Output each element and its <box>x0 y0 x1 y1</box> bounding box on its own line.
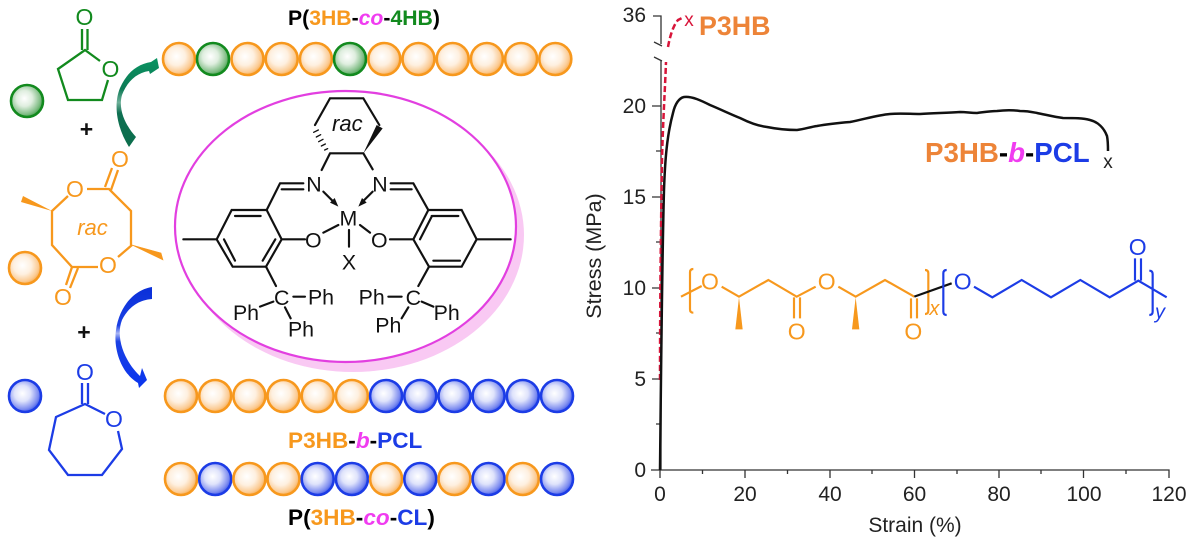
salen ligand structure: O <box>371 228 388 252</box>
molecule: racemic diolide: O <box>54 284 72 310</box>
label: P(3HB-co-CL): P(3HB-co-CL) <box>288 505 435 530</box>
y tick labels <box>623 4 646 482</box>
axes and ticks <box>651 16 1169 478</box>
break marker: P3HB: x <box>684 10 694 31</box>
title: P(3HB-co-4HB): P(3HB-co-4HB) <box>288 7 440 30</box>
x tick labels: 100 <box>1066 483 1102 506</box>
molecule: racemic diolide: O <box>111 146 129 172</box>
ellipse shadow <box>182 98 524 372</box>
panel: catalyst <box>175 91 524 372</box>
P3HB repeat unit: O <box>818 268 836 294</box>
bead: orange monomer <box>9 252 41 284</box>
bead chain: P3HB-b-PCL <box>165 380 573 412</box>
bead: green monomer <box>11 85 43 117</box>
bead chain: P(3HB-co-4HB) <box>163 43 571 75</box>
chart: stress-strain <box>582 4 1187 537</box>
molecule: caprolactone: O <box>76 359 94 385</box>
break marker: P3HB-b-PCL: x <box>1103 152 1113 173</box>
molecule: gamma-butyrolactone: O <box>102 56 119 82</box>
molecule: gamma-butyrolactone: O <box>76 4 93 30</box>
curve: P3HB <box>660 17 684 380</box>
y tick labels: 5 <box>634 368 646 391</box>
salen ligand structure: rac <box>332 111 363 136</box>
P3HB repeat unit <box>681 268 940 344</box>
PCL repeat unit: O <box>954 268 972 294</box>
molecule: gamma-butyrolactone <box>58 4 119 100</box>
salen ligand structure <box>183 98 511 342</box>
PCL repeat unit <box>943 234 1167 323</box>
molecule: racemic diolide <box>21 146 163 310</box>
ellipse outline <box>175 91 516 362</box>
salen ligand structure: O <box>305 228 322 252</box>
salen ligand structure: Ph <box>359 285 385 309</box>
salen ligand structure: Ph <box>308 285 334 309</box>
P3HB repeat unit: O <box>701 268 719 294</box>
molecule: caprolactone <box>49 359 123 475</box>
x tick labels: 80 <box>987 483 1011 506</box>
y tick labels: 36 <box>623 4 646 27</box>
arrow: blue curved <box>115 287 152 388</box>
linking bond <box>914 283 952 297</box>
bead chain: P(3HB-co-CL) <box>165 463 573 495</box>
salen ligand structure: Ph <box>375 314 401 338</box>
plus sign: + <box>80 116 93 142</box>
molecule: racemic diolide: rac <box>77 215 108 240</box>
salen ligand structure: Ph <box>288 318 314 342</box>
y tick labels: 20 <box>623 95 646 118</box>
salen ligand structure: C <box>274 286 289 310</box>
molecule: caprolactone: O <box>105 406 123 432</box>
x axis title: Strain (%) <box>868 514 962 537</box>
plus sign: + <box>77 319 91 345</box>
y tick labels: 15 <box>623 186 646 209</box>
P3HB repeat unit: x <box>928 298 940 320</box>
x tick labels: 0 <box>654 483 666 506</box>
PCL repeat unit: y <box>1153 301 1166 323</box>
x tick labels: 20 <box>733 483 757 506</box>
P3HB repeat unit: O <box>788 318 806 344</box>
salen ligand structure: Ph <box>434 301 460 325</box>
salen ligand structure: X <box>342 250 356 274</box>
PCL repeat unit: O <box>1129 234 1147 260</box>
y tick labels: 10 <box>623 277 646 300</box>
molecule: racemic diolide: O <box>66 176 84 202</box>
salen ligand structure: M <box>339 207 357 231</box>
bead: blue monomer <box>9 380 41 412</box>
x tick labels <box>654 483 1187 506</box>
curve: P3HB-b-PCL <box>660 97 1108 470</box>
salen ligand structure: C <box>406 286 421 310</box>
molecule: racemic diolide: O <box>99 252 117 278</box>
label: P3HB-b-PCL: P3HB-b-PCL <box>925 137 1090 168</box>
salen ligand structure: Ph <box>233 301 259 325</box>
P3HB repeat unit: O <box>904 318 922 344</box>
y axis title: Stress (MPa) <box>582 193 606 319</box>
label: P3HB: P3HB <box>699 11 770 41</box>
salen ligand structure: N <box>306 173 322 197</box>
salen ligand structure: N <box>372 173 388 197</box>
x tick labels: 40 <box>818 483 842 506</box>
arrow: green curved <box>117 58 159 147</box>
x tick labels: 60 <box>903 483 926 506</box>
x tick labels: 120 <box>1151 483 1187 506</box>
structure: block copolymer <box>681 234 1167 344</box>
y tick labels: 0 <box>634 459 646 482</box>
label: P3HB-b-PCL: P3HB-b-PCL <box>288 428 423 453</box>
